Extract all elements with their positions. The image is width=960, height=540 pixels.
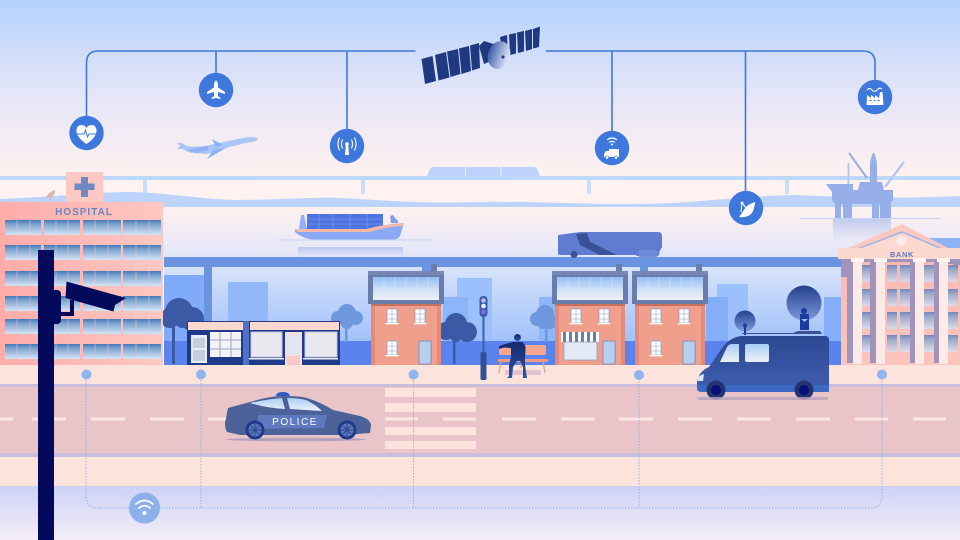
car wheels xyxy=(246,420,356,440)
sensor nodes xyxy=(82,370,887,380)
icon: factory xyxy=(858,80,892,114)
satellite uplink lines xyxy=(86,51,875,192)
small dish xyxy=(734,310,756,335)
pedestrian crossing xyxy=(385,388,476,449)
brick building right xyxy=(632,264,708,365)
bank xyxy=(838,224,960,365)
van body xyxy=(697,336,829,392)
icon: health heart xyxy=(69,116,104,150)
tree dark xyxy=(437,313,477,364)
distant rail bridge xyxy=(0,176,960,194)
van windows xyxy=(697,344,769,381)
pavement lower xyxy=(0,457,960,486)
bank windows xyxy=(861,265,958,352)
distant train xyxy=(427,167,540,176)
distant city backdrop xyxy=(164,266,960,346)
autonomous truck xyxy=(558,232,662,258)
water strip xyxy=(164,341,960,365)
seated person xyxy=(499,334,527,378)
security camera on pole xyxy=(38,250,126,540)
traffic light xyxy=(480,296,488,380)
hospital windows xyxy=(5,220,161,359)
ground foreground xyxy=(0,486,960,540)
siren xyxy=(276,392,290,396)
tree light xyxy=(331,304,363,342)
tree xyxy=(160,298,204,364)
icon: antenna xyxy=(330,129,364,163)
awning xyxy=(561,332,599,342)
police car xyxy=(225,392,371,441)
pavement upper xyxy=(0,365,960,384)
elevated road xyxy=(164,257,844,323)
road xyxy=(0,384,960,457)
icon: satellite dish xyxy=(729,191,763,225)
icon: airplane xyxy=(199,73,233,107)
bench with person xyxy=(498,334,548,378)
rooftop dish xyxy=(45,190,55,202)
satellite dish xyxy=(484,38,514,72)
airplane xyxy=(177,137,258,159)
satellite xyxy=(422,26,540,84)
oil rig xyxy=(800,153,940,241)
sky background xyxy=(0,0,960,176)
left shops xyxy=(187,321,340,365)
news van xyxy=(697,286,829,400)
hospital sign with cross xyxy=(66,172,103,202)
lane dashes xyxy=(0,418,946,420)
brick shop building xyxy=(552,264,628,365)
column shadows xyxy=(841,259,960,363)
hospital building xyxy=(0,202,163,365)
large dish xyxy=(786,286,822,330)
container ship xyxy=(278,214,432,257)
icon: connected truck xyxy=(595,131,629,165)
hospital xyxy=(0,172,163,365)
distant hills xyxy=(0,192,960,207)
bank name: BANK xyxy=(890,250,914,259)
sensor network dotted lines xyxy=(86,374,882,508)
brick building left xyxy=(368,264,444,365)
tree light xyxy=(530,305,557,342)
car label: POLICE xyxy=(272,417,318,428)
bank columns xyxy=(851,258,950,364)
solar panels xyxy=(422,26,540,84)
van wheels xyxy=(706,380,814,400)
icon: wifi hub xyxy=(129,492,160,524)
hospital name: HOSPITAL xyxy=(55,207,113,218)
haze band behind the city xyxy=(0,176,960,266)
